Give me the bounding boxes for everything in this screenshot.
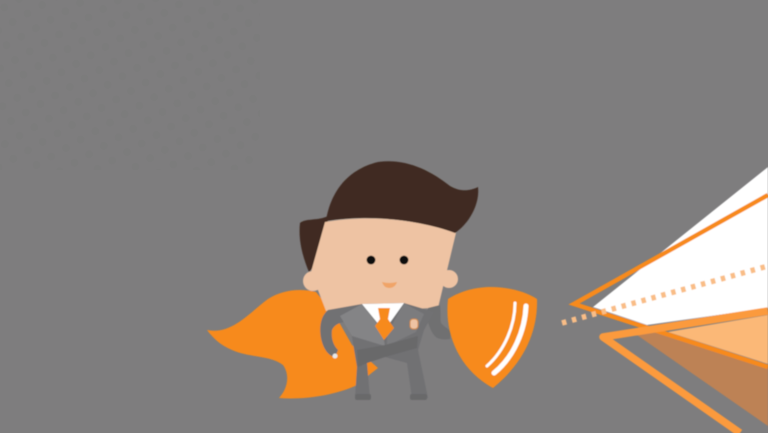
- lapels: [340, 304, 385, 346]
- right ear: [440, 270, 458, 288]
- peach beam: [668, 315, 768, 364]
- mouth: [382, 282, 397, 288]
- shirt: [362, 303, 404, 331]
- hem shadow: [357, 336, 418, 367]
- cuff: [332, 354, 338, 358]
- white beam: [593, 167, 768, 325]
- brown beam: [637, 332, 768, 426]
- shield: [447, 287, 537, 388]
- lapel pin: [410, 319, 418, 329]
- light beams: [562, 167, 768, 433]
- suit: [320, 303, 434, 398]
- back hair: [300, 216, 328, 272]
- cape: [207, 290, 378, 398]
- shield highlights: [487, 303, 515, 366]
- main hair: [326, 161, 478, 233]
- face: [311, 218, 456, 311]
- lower outline: [603, 311, 768, 433]
- dotted ray: [562, 266, 768, 323]
- tie: [375, 308, 394, 340]
- left ear: [303, 271, 323, 291]
- upper outline: [574, 195, 768, 367]
- feet: [355, 394, 427, 400]
- raised arm: [426, 305, 451, 339]
- superhero businessman: [207, 161, 478, 400]
- eyes: [367, 256, 408, 264]
